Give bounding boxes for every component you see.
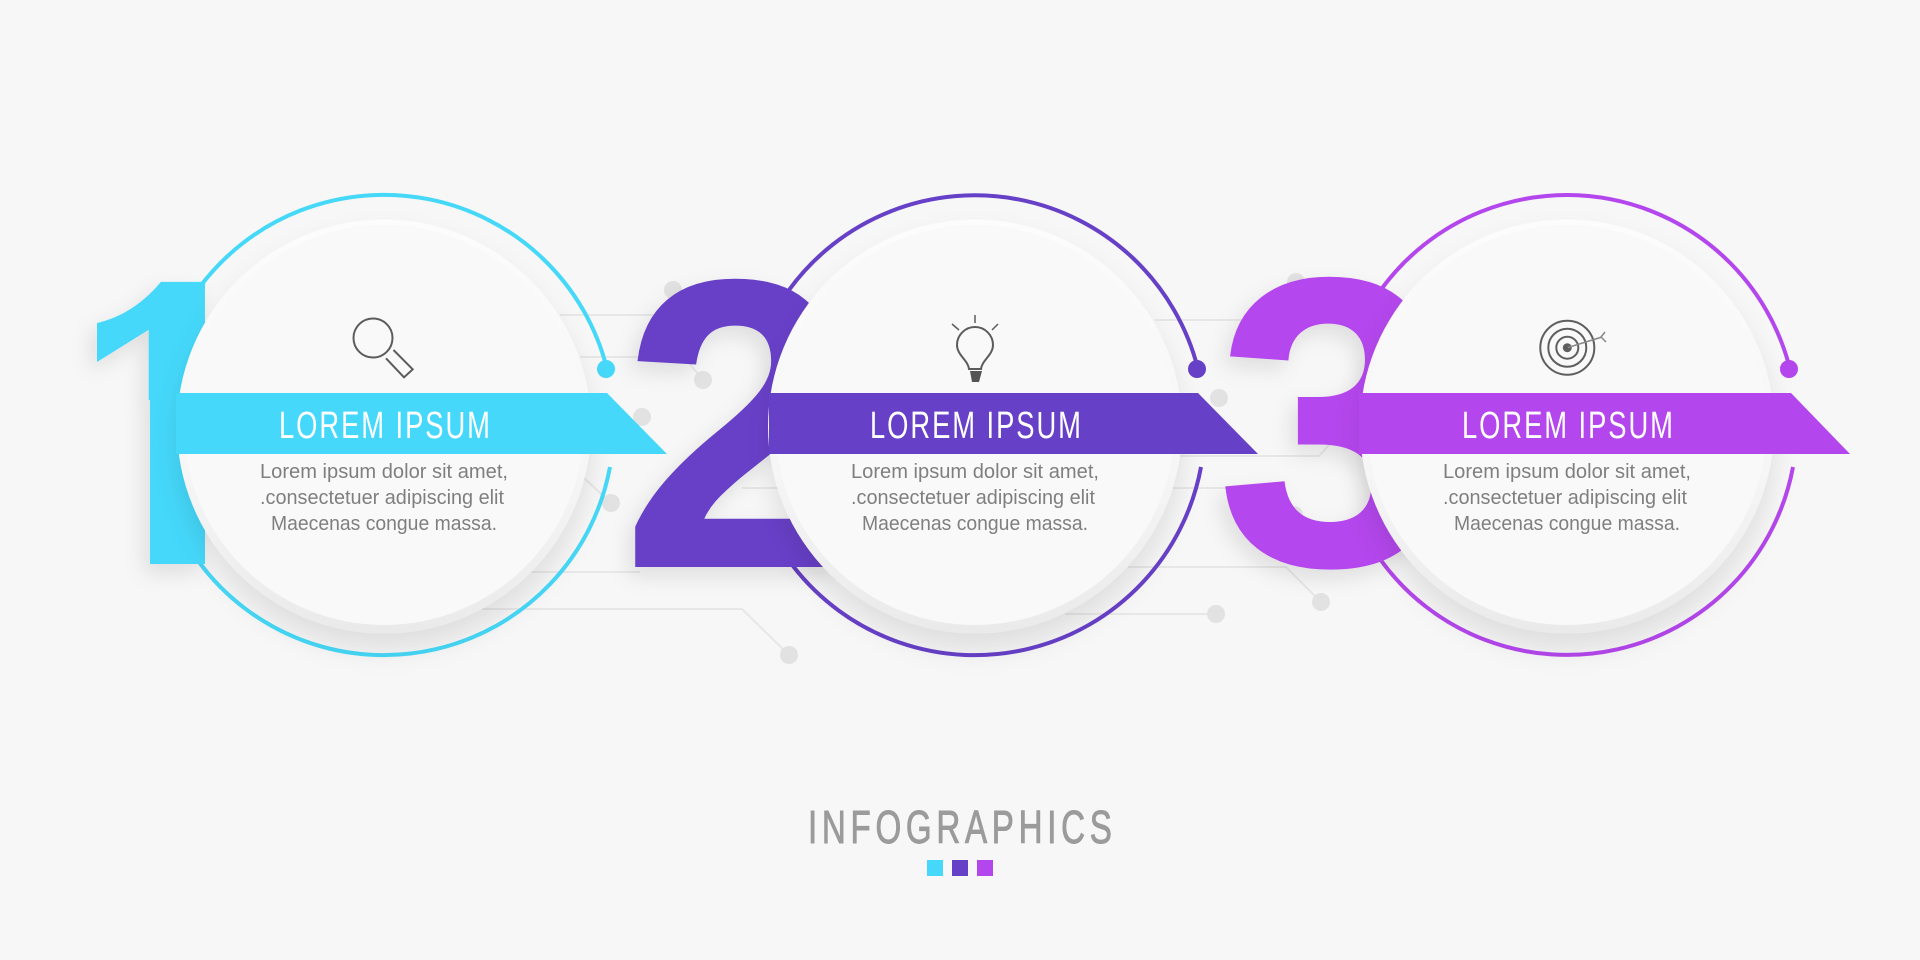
legend squares bbox=[927, 860, 993, 876]
number 3: 3 bbox=[1217, 193, 1445, 651]
panel: step 3 bbox=[1217, 193, 1850, 655]
text block 1: .consectetuer adipiscing elit bbox=[260, 487, 504, 509]
banner 2 bbox=[769, 393, 1258, 454]
ring 3 bbox=[1380, 195, 1798, 655]
text block 2 bbox=[851, 461, 1099, 535]
title: INFOGRAPHICS bbox=[808, 803, 1112, 853]
text block 1: Maecenas congue massa. bbox=[271, 513, 497, 535]
disc 1 bbox=[177, 220, 591, 634]
icon: target bbox=[1540, 321, 1606, 375]
text block 2: .consectetuer adipiscing elit bbox=[851, 487, 1095, 509]
disc 2 bbox=[768, 220, 1182, 634]
number 2: 2 bbox=[622, 195, 850, 653]
text block 1: Lorem ipsum dolor sit amet, bbox=[260, 461, 508, 483]
text block 3: .consectetuer adipiscing elit bbox=[1443, 487, 1687, 509]
banner 3 bbox=[1359, 393, 1850, 454]
text block 1 bbox=[260, 461, 508, 535]
icon: magnifier bbox=[354, 318, 413, 377]
text block 3: Maecenas congue massa. bbox=[1454, 513, 1680, 535]
icon: light bulb bbox=[952, 315, 998, 382]
text block 2: Lorem ipsum dolor sit amet, bbox=[851, 461, 1099, 483]
ring 2 bbox=[789, 195, 1206, 655]
heading 1: LOREM IPSUM bbox=[279, 405, 490, 447]
text block 2: Maecenas congue massa. bbox=[862, 513, 1088, 535]
panel: step 1 bbox=[53, 193, 667, 655]
banner 1 bbox=[176, 393, 667, 454]
heading 2: LOREM IPSUM bbox=[870, 405, 1081, 447]
circuit background lines bbox=[482, 273, 1340, 664]
disc 3 bbox=[1360, 220, 1774, 634]
text block 3 bbox=[1443, 461, 1691, 535]
heading 3: LOREM IPSUM bbox=[1462, 405, 1673, 447]
ring 1 bbox=[199, 195, 615, 655]
panel: step 2 bbox=[622, 195, 1258, 655]
text block 3: Lorem ipsum dolor sit amet, bbox=[1443, 461, 1691, 483]
number 1: 1 bbox=[53, 193, 281, 651]
